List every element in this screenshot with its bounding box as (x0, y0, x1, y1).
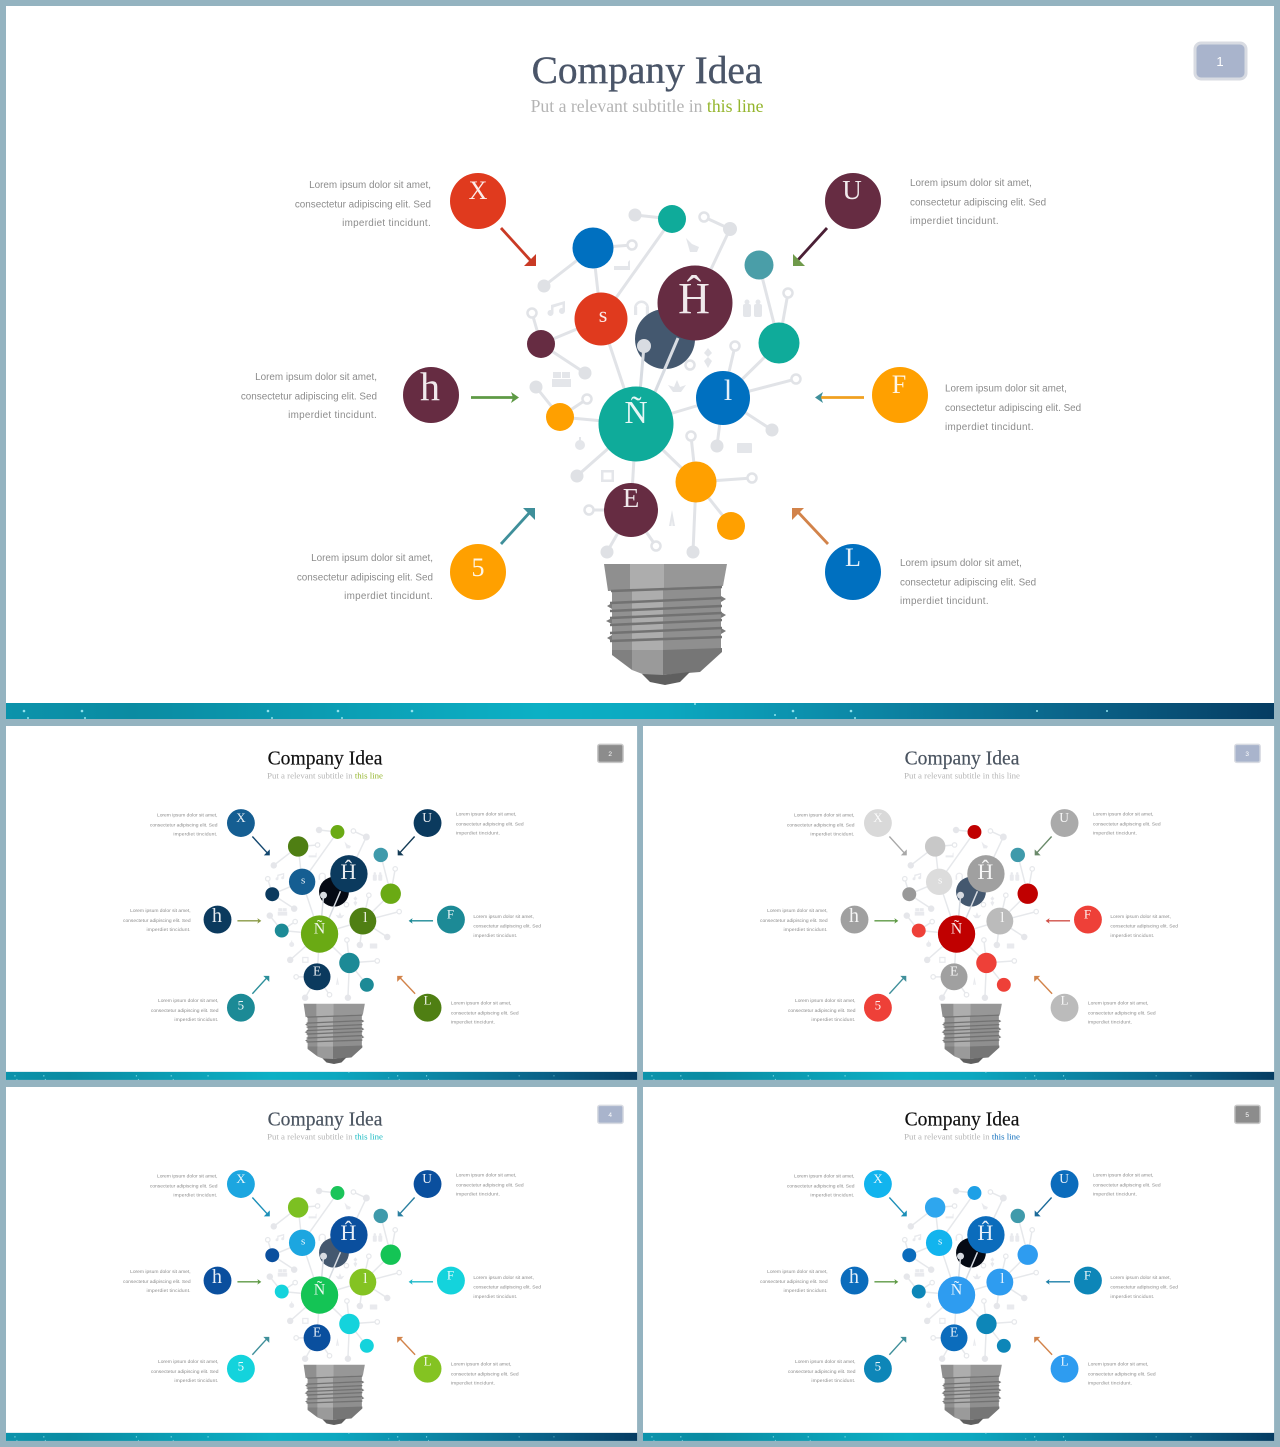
network circles: l (1000, 910, 1004, 926)
callout F: consectetur adipiscing elit. Sed (473, 1285, 541, 1291)
network lines and icons (266, 827, 401, 1001)
network circles: E (313, 1324, 321, 1339)
network circles: Ĥ (678, 274, 710, 323)
callout U: imperdiet tincidunt. (910, 216, 999, 227)
callout h (241, 364, 459, 423)
bulb base (304, 1365, 365, 1425)
callout F: imperdiet tincidunt. (473, 1294, 518, 1300)
callout h: imperdiet tincidunt. (146, 927, 191, 933)
callout 5: consectetur adipiscing elit. Sed (297, 572, 433, 584)
network circles: Ĥ (341, 1220, 357, 1245)
callout 5: Lorem ipsum dolor sit amet, (158, 1359, 219, 1365)
callout U (825, 173, 1046, 229)
callout L: L (845, 543, 861, 572)
panel: slide 1 (6, 6, 1274, 719)
callout 5: imperdiet tincidunt. (344, 591, 433, 602)
callout U: consectetur adipiscing elit. Sed (910, 198, 1046, 208)
callout 5 (297, 544, 506, 602)
network circles: Ĥ (978, 859, 994, 884)
callout F: Lorem ipsum dolor sit amet, (473, 914, 534, 920)
subtitle: Put a relevant subtitle in this line (531, 96, 764, 116)
callout 5: 5 (238, 998, 244, 1013)
panel: slide 2 (6, 726, 637, 1080)
callout 5: consectetur adipiscing elit. Sed (151, 1008, 219, 1014)
callout h: Lorem ipsum dolor sit amet, (255, 372, 377, 383)
subtitle: Put a relevant subtitle in this line (904, 771, 1020, 781)
callout h: Lorem ipsum dolor sit amet, (130, 1269, 191, 1275)
bulb base (941, 1004, 1002, 1064)
network circles: Ñ (951, 1281, 963, 1299)
callout U: imperdiet tincidunt. (1093, 1191, 1137, 1197)
callout 5: 5 (875, 998, 881, 1013)
callout F (872, 367, 1081, 433)
callout F (437, 906, 541, 939)
callout F: Lorem ipsum dolor sit amet, (1110, 1275, 1171, 1281)
callout F: F (1084, 1268, 1091, 1283)
callout F: Lorem ipsum dolor sit amet, (473, 1275, 534, 1281)
callout h (760, 1266, 868, 1295)
callout F: consectetur adipiscing elit. Sed (945, 403, 1081, 414)
arrows (471, 228, 864, 544)
callout X: consectetur adipiscing elit. Sed (150, 1183, 218, 1189)
callout 5: 5 (875, 1359, 881, 1374)
arrows (874, 1197, 1070, 1355)
callout U: U (842, 175, 862, 205)
callout F: F (1084, 907, 1091, 922)
subtitle: Put a relevant subtitle in this line (904, 1132, 1020, 1142)
callout L (1051, 1354, 1156, 1387)
callout L: Lorem ipsum dolor sit amet, (1088, 1362, 1148, 1368)
callout h: consectetur adipiscing elit. Sed (123, 1279, 191, 1285)
callout L: L (424, 1354, 432, 1369)
callout L: consectetur adipiscing elit. Sed (1088, 1010, 1156, 1016)
callout F: consectetur adipiscing elit. Sed (473, 924, 541, 930)
subtitle: Put a relevant subtitle in this line (267, 1132, 383, 1142)
callout U: U (1059, 810, 1069, 825)
network circles: s (301, 874, 305, 886)
network circles: l (363, 1271, 367, 1287)
callout 5: imperdiet tincidunt. (811, 1378, 856, 1384)
callout F: imperdiet tincidunt. (945, 422, 1034, 433)
callout L: L (424, 993, 432, 1008)
callout U: Lorem ipsum dolor sit amet, (910, 178, 1032, 189)
title: Company Idea (905, 748, 1020, 769)
callout L (414, 993, 519, 1026)
callout L: consectetur adipiscing elit. Sed (451, 1371, 519, 1377)
callout 5 (788, 994, 892, 1023)
bulb base (304, 1004, 365, 1064)
network circles: l (724, 374, 732, 407)
network circles: s (938, 1235, 942, 1247)
callout 5: 5 (238, 1359, 244, 1374)
callout 5 (151, 994, 255, 1023)
callout h: imperdiet tincidunt. (146, 1288, 191, 1294)
callout h (123, 905, 231, 934)
page number badge: 5 (1245, 1112, 1249, 1119)
footer bar (6, 703, 1274, 719)
callout U (1051, 1170, 1161, 1198)
callout F: F (892, 370, 906, 399)
callout 5: 5 (472, 553, 484, 582)
callout h: consectetur adipiscing elit. Sed (760, 1279, 828, 1285)
panel: slide 5 (643, 1087, 1274, 1441)
callout X: consectetur adipiscing elit. Sed (295, 200, 431, 210)
callout L: consectetur adipiscing elit. Sed (1088, 1371, 1156, 1377)
network circles: s (301, 1235, 305, 1247)
callout X: imperdiet tincidunt. (810, 1192, 855, 1198)
callout F (1074, 906, 1178, 939)
callout L: consectetur adipiscing elit. Sed (451, 1010, 519, 1016)
callout X (295, 173, 506, 229)
callout L: Lorem ipsum dolor sit amet, (451, 1362, 511, 1368)
network circles (265, 825, 401, 992)
callout L: imperdiet tincidunt. (451, 1020, 495, 1026)
subtitle: Put a relevant subtitle in this line (267, 771, 383, 781)
arrows (874, 836, 1070, 994)
callout L: imperdiet tincidunt. (451, 1381, 495, 1387)
network lines and icons (903, 1188, 1038, 1362)
network circles: E (313, 963, 321, 978)
callout F: F (447, 907, 454, 922)
callout 5 (151, 1355, 255, 1384)
network circles (265, 1186, 401, 1353)
callout U: U (1059, 1171, 1069, 1186)
callout F (1074, 1267, 1178, 1300)
footer bar (6, 1072, 637, 1080)
callout L: Lorem ipsum dolor sit amet, (1088, 1001, 1148, 1007)
callout L: consectetur adipiscing elit. Sed (900, 578, 1036, 588)
panel: slide 3 (643, 726, 1274, 1080)
network circles (527, 205, 800, 540)
callout X: Lorem ipsum dolor sit amet, (794, 813, 855, 819)
callout h: consectetur adipiscing elit. Sed (241, 392, 377, 402)
network lines and icons (528, 208, 800, 558)
network circles: l (1000, 1271, 1004, 1287)
callout F: consectetur adipiscing elit. Sed (1110, 1285, 1178, 1291)
callout 5: Lorem ipsum dolor sit amet, (795, 998, 856, 1004)
callout U: Lorem ipsum dolor sit amet, (456, 812, 516, 818)
callout h: Lorem ipsum dolor sit amet, (767, 1269, 828, 1275)
callout L: Lorem ipsum dolor sit amet, (900, 558, 1022, 569)
callout 5: imperdiet tincidunt. (174, 1378, 219, 1384)
callout U: consectetur adipiscing elit. Sed (456, 1182, 524, 1188)
network circles: l (363, 910, 367, 926)
bulb base (941, 1365, 1002, 1425)
callout U: Lorem ipsum dolor sit amet, (456, 1173, 516, 1179)
callout X: imperdiet tincidunt. (173, 1192, 218, 1198)
callout h: h (212, 1266, 222, 1288)
callout h: Lorem ipsum dolor sit amet, (767, 908, 828, 914)
callout F: Lorem ipsum dolor sit amet, (945, 384, 1067, 394)
callout X: imperdiet tincidunt. (810, 831, 855, 837)
callout X: X (873, 810, 883, 825)
callout U (414, 1170, 524, 1198)
callout X (787, 809, 892, 837)
title: Company Idea (905, 1109, 1020, 1130)
callout 5: imperdiet tincidunt. (174, 1017, 219, 1023)
callout L: imperdiet tincidunt. (1088, 1381, 1132, 1387)
callout F: Lorem ipsum dolor sit amet, (1110, 914, 1171, 920)
callout h: consectetur adipiscing elit. Sed (123, 918, 191, 924)
callout L (825, 543, 1036, 607)
network circles (902, 1186, 1038, 1353)
callout L: imperdiet tincidunt. (900, 596, 989, 607)
callout h: Lorem ipsum dolor sit amet, (130, 908, 191, 914)
callout L: imperdiet tincidunt. (1088, 1020, 1132, 1026)
page number badge: 3 (1245, 751, 1249, 758)
title: Company Idea (268, 748, 383, 769)
arrows (237, 1197, 433, 1355)
callout X: imperdiet tincidunt. (173, 831, 218, 837)
callout 5: consectetur adipiscing elit. Sed (788, 1369, 856, 1375)
callout X: consectetur adipiscing elit. Sed (787, 1183, 855, 1189)
callout X: X (873, 1171, 883, 1186)
callout U (414, 809, 524, 837)
callout h: imperdiet tincidunt. (288, 410, 377, 421)
network circles: E (950, 1324, 958, 1339)
network circles: s (599, 302, 607, 327)
page number badge: 2 (608, 751, 612, 758)
network lines and icons (903, 827, 1038, 1001)
network circles: Ĥ (341, 859, 357, 884)
callout L (1051, 993, 1156, 1026)
network circles: Ñ (624, 394, 648, 430)
network circles: Ñ (314, 1281, 326, 1299)
callout X: consectetur adipiscing elit. Sed (787, 822, 855, 828)
callout F: F (447, 1268, 454, 1283)
page number badge: 1 (1216, 54, 1224, 69)
callout h: imperdiet tincidunt. (783, 1288, 828, 1294)
callout U: U (422, 1171, 432, 1186)
callout h: imperdiet tincidunt. (783, 927, 828, 933)
callout F (437, 1267, 541, 1300)
page number badge (598, 1105, 623, 1123)
callout X: imperdiet tincidunt. (342, 218, 431, 229)
callout h: consectetur adipiscing elit. Sed (760, 918, 828, 924)
network lines and icons (266, 1188, 401, 1362)
page number badge (1235, 744, 1260, 762)
callout X: Lorem ipsum dolor sit amet, (157, 1174, 218, 1180)
callout F: imperdiet tincidunt. (1110, 933, 1155, 939)
bulb base (604, 564, 727, 685)
callout 5: Lorem ipsum dolor sit amet, (311, 553, 433, 564)
callout L: L (1061, 993, 1069, 1008)
callout U: imperdiet tincidunt. (456, 1191, 500, 1197)
callout X: Lorem ipsum dolor sit amet, (309, 180, 431, 191)
panel: slide 4 (6, 1087, 637, 1441)
callout 5: Lorem ipsum dolor sit amet, (795, 1359, 856, 1365)
callout U: consectetur adipiscing elit. Sed (456, 821, 524, 827)
callout 5: consectetur adipiscing elit. Sed (151, 1369, 219, 1375)
callout F: imperdiet tincidunt. (1110, 1294, 1155, 1300)
title: Company Idea (268, 1109, 383, 1130)
callout L: Lorem ipsum dolor sit amet, (451, 1001, 511, 1007)
page number badge: 4 (608, 1112, 612, 1119)
network circles (902, 825, 1038, 992)
network circles: Ñ (951, 920, 963, 938)
page number badge (1195, 43, 1246, 79)
callout X: Lorem ipsum dolor sit amet, (794, 1174, 855, 1180)
callout h (123, 1266, 231, 1295)
callout 5: imperdiet tincidunt. (811, 1017, 856, 1023)
callout U (1051, 809, 1161, 837)
callout 5: Lorem ipsum dolor sit amet, (158, 998, 219, 1004)
footer bar (6, 1433, 637, 1441)
callout F: consectetur adipiscing elit. Sed (1110, 924, 1178, 930)
callout L: L (1061, 1354, 1069, 1369)
callout U: imperdiet tincidunt. (1093, 830, 1137, 836)
callout U: U (422, 810, 432, 825)
page number badge (598, 744, 623, 762)
callout X (150, 809, 255, 837)
network circles: Ĥ (978, 1220, 994, 1245)
callout 5 (788, 1355, 892, 1384)
callout L (414, 1354, 519, 1387)
callout X (787, 1170, 892, 1198)
title: Company Idea (532, 48, 762, 92)
network circles: E (950, 963, 958, 978)
footer bar (643, 1433, 1274, 1441)
callout X: X (236, 810, 246, 825)
callout h: h (212, 905, 222, 927)
arrows (237, 836, 433, 994)
callout U: imperdiet tincidunt. (456, 830, 500, 836)
callout 5: consectetur adipiscing elit. Sed (788, 1008, 856, 1014)
callout X: X (469, 176, 488, 205)
callout h: h (849, 1266, 859, 1288)
network circles: s (938, 874, 942, 886)
network circles: E (623, 483, 639, 513)
page number badge (1235, 1105, 1260, 1123)
callout F: imperdiet tincidunt. (473, 933, 518, 939)
callout h: h (849, 905, 859, 927)
callout h: h (420, 364, 440, 409)
callout X (150, 1170, 255, 1198)
callout X: X (236, 1171, 246, 1186)
network circles: Ñ (314, 920, 326, 938)
callout U: Lorem ipsum dolor sit amet, (1093, 1173, 1153, 1179)
footer bar (643, 1072, 1274, 1080)
callout h (760, 905, 868, 934)
callout U: consectetur adipiscing elit. Sed (1093, 821, 1161, 827)
callout U: Lorem ipsum dolor sit amet, (1093, 812, 1153, 818)
callout X: consectetur adipiscing elit. Sed (150, 822, 218, 828)
callout X: Lorem ipsum dolor sit amet, (157, 813, 218, 819)
callout U: consectetur adipiscing elit. Sed (1093, 1182, 1161, 1188)
